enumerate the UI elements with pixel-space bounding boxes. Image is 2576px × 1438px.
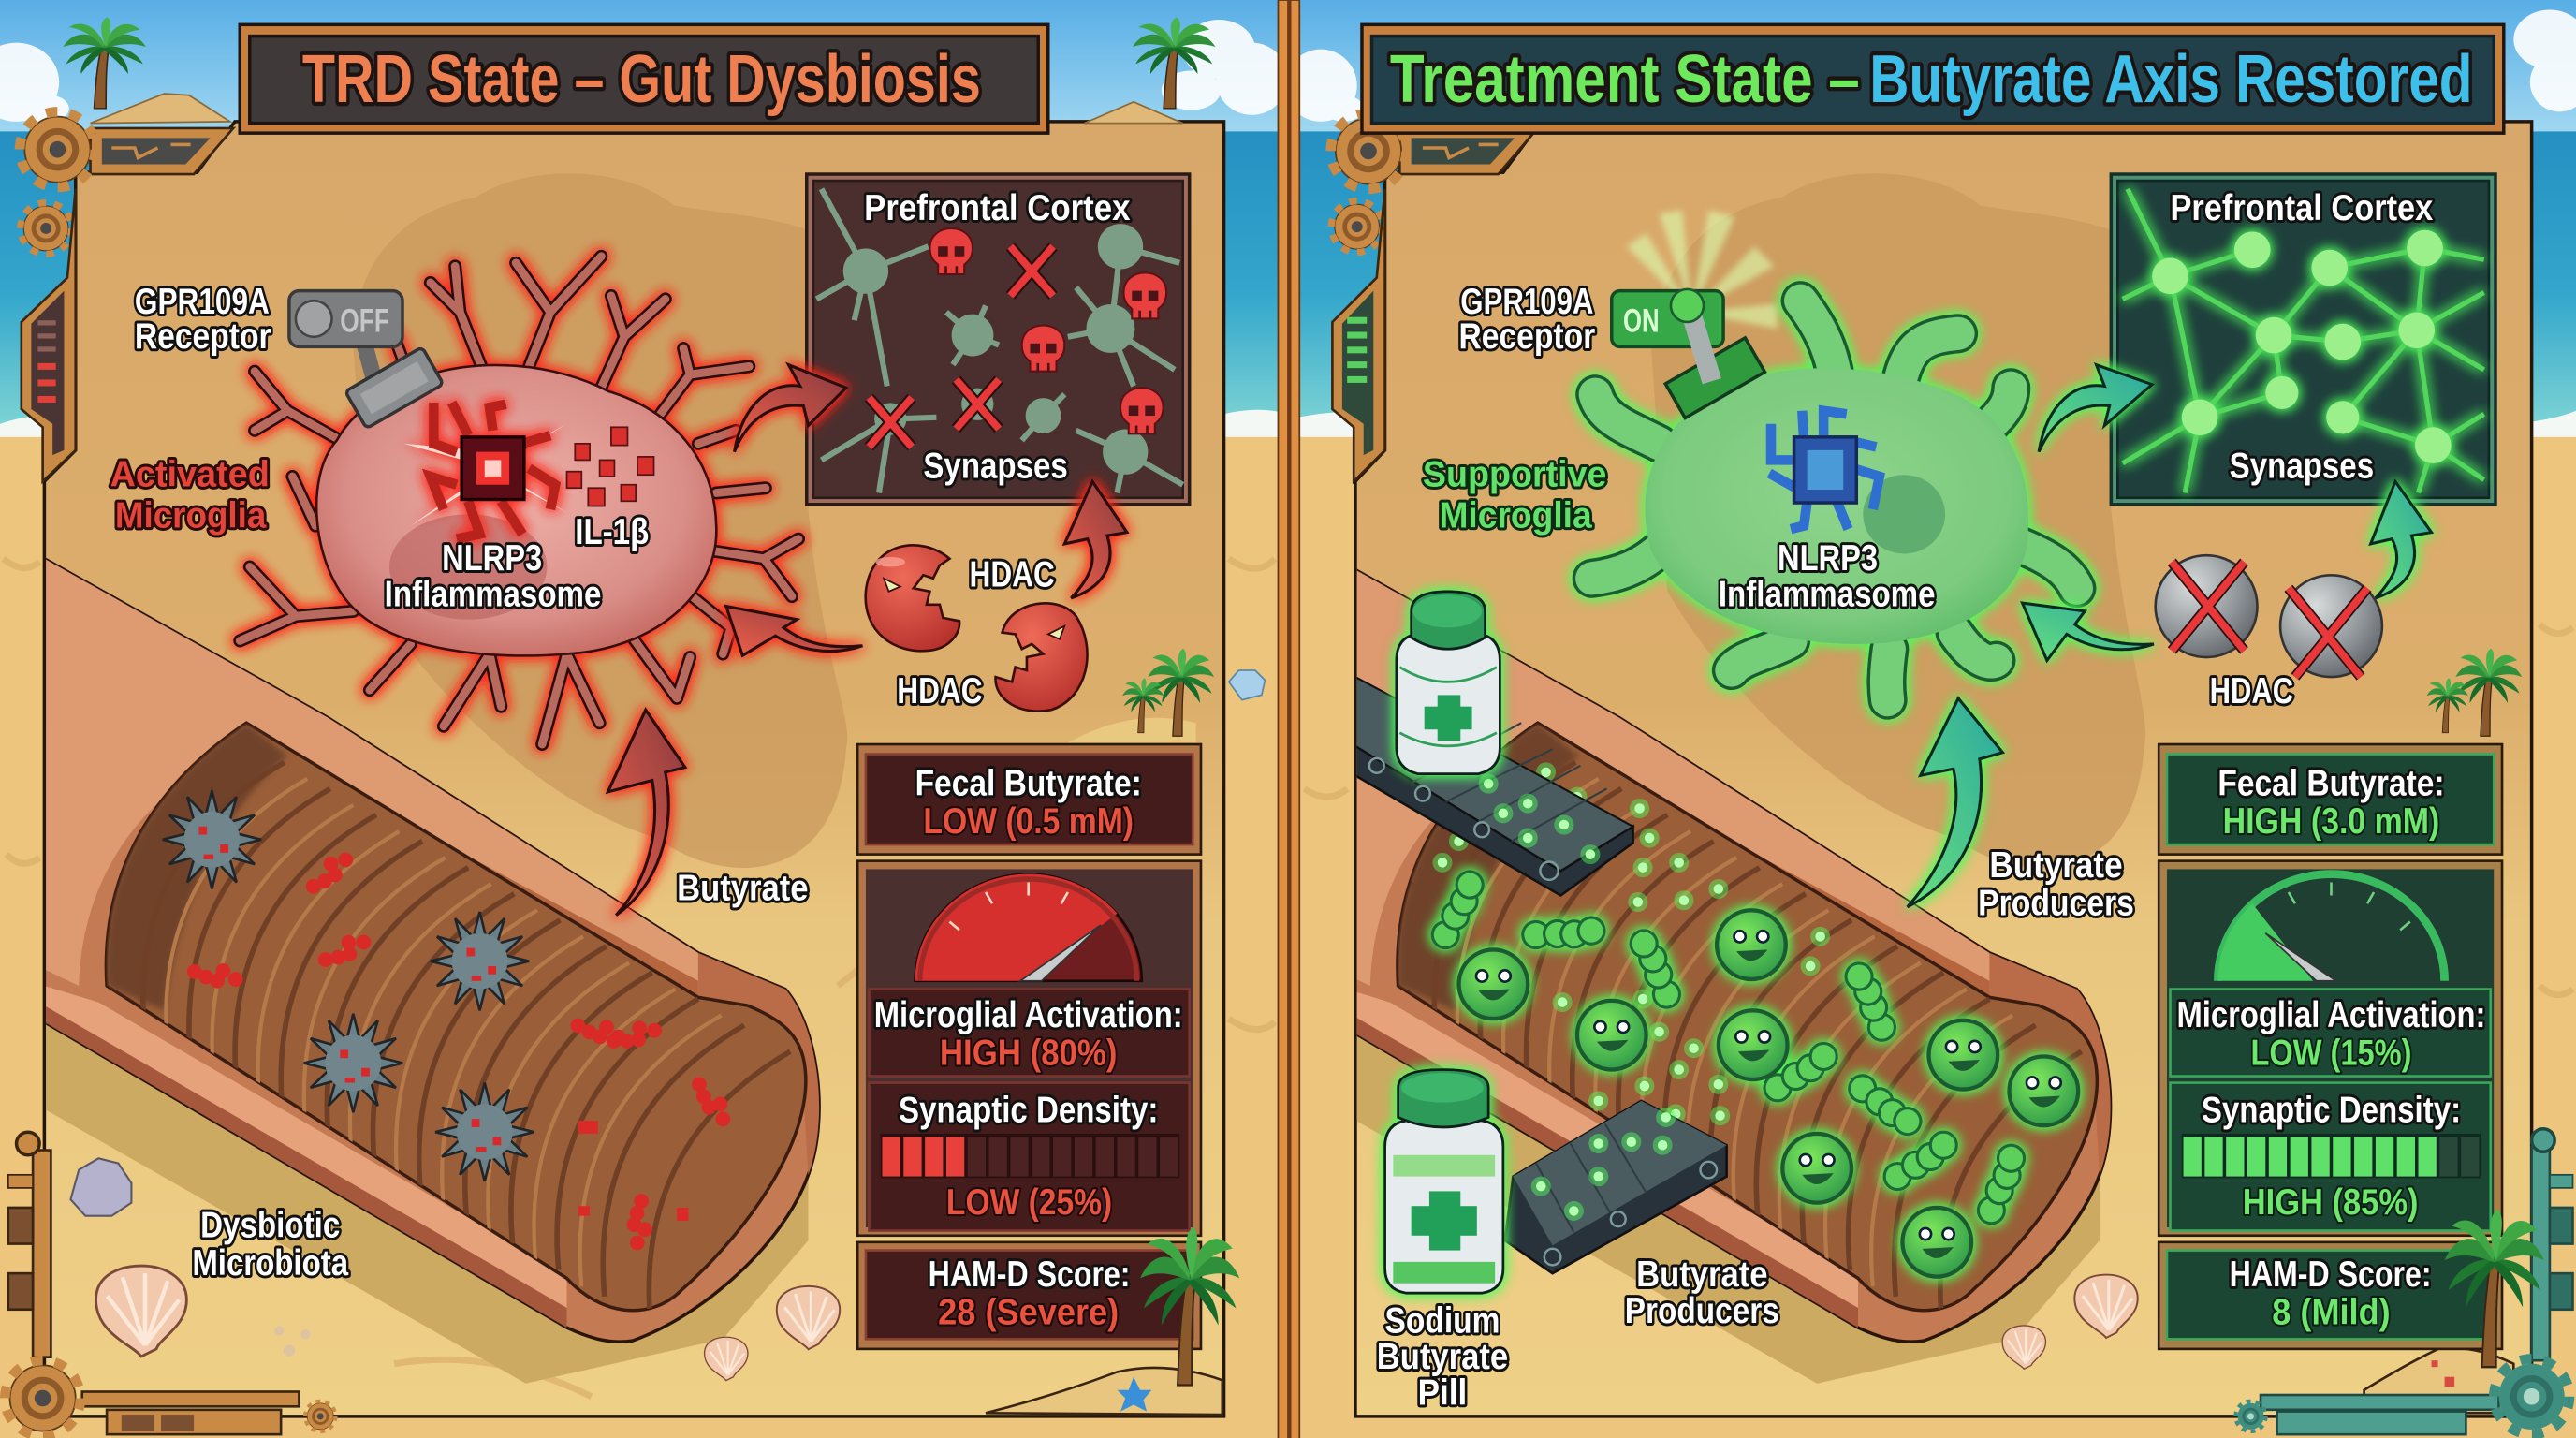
frame ornament: right gears and circuit	[1331, 113, 2572, 1434]
arrow: HDAC to cortex	[1064, 481, 1127, 598]
stat: gauge and density right: Microglial Activation:	[2177, 995, 2485, 1035]
stat: gauge and density right: HIGH (85%)	[2243, 1182, 2419, 1223]
supportive microglia label: Microglia	[1439, 495, 1592, 536]
butyrate producers label upper: Producers	[1978, 884, 2134, 924]
cortex panel left	[807, 174, 1190, 505]
supportive microglia cell	[1592, 301, 2076, 700]
NLRP3 label left	[385, 538, 601, 615]
NLRP3 label left: Inflammasome	[385, 575, 601, 615]
HDAC labels: HDAC	[970, 555, 1055, 595]
stat: HAM-D left	[857, 1242, 1201, 1349]
cell nucleus shading	[389, 514, 547, 620]
title: treatment state	[1362, 24, 2504, 133]
microglial activation gauge	[2217, 874, 2445, 981]
stat: fecal butyrate left	[857, 744, 1201, 855]
stat: gauge and density right	[2159, 861, 2502, 1236]
title: treatment state: Treatment State –	[1390, 42, 1860, 117]
top sodium butyrate bottle	[1397, 592, 1500, 774]
stat: fecal butyrate left: Fecal Butyrate:	[915, 763, 1142, 803]
arrow: butyrate to microglia treatment	[1908, 698, 2002, 907]
panel frame and sand	[44, 122, 1224, 1416]
receptor switch on: ON	[1623, 303, 1660, 340]
activated microglia cell	[240, 257, 798, 744]
HDAC labels	[897, 555, 1055, 712]
sodium butyrate pill label: Sodium	[1385, 1300, 1500, 1341]
activated microglia label: Activated	[110, 454, 270, 494]
butyrate label: Butyrate	[677, 869, 809, 909]
HDAC label right: HDAC	[2210, 671, 2293, 712]
IL-1 beta particles	[567, 427, 654, 506]
inhibited HDAC right sphere	[2280, 575, 2382, 677]
title: TRD state	[240, 24, 1048, 133]
arrow: microglia to cortex treatment	[2039, 365, 2152, 452]
NLRP3 inflammasome active chip	[404, 403, 567, 539]
receptor label right	[1459, 282, 1595, 357]
stat: HAM-D left: 28 (Severe)	[938, 1293, 1119, 1333]
stat: gauge and density left: Synaptic Density:	[899, 1091, 1158, 1131]
butyrate sparkles	[1432, 762, 1830, 1125]
right cell nucleus shading	[1863, 475, 1945, 553]
stat: fecal butyrate right: HIGH (3.0 mM)	[2223, 801, 2439, 842]
sodium butyrate pill label: Pill	[1418, 1373, 1467, 1414]
palm over HAM-D left	[1140, 1227, 1239, 1385]
stat: gauge and density left: LOW (25%)	[946, 1182, 1112, 1223]
HDAC enzyme bottom	[996, 603, 1088, 712]
microglial activation gauge	[915, 874, 1142, 981]
receptor label right: Receptor	[1459, 316, 1595, 357]
butyrate producers label lower: Butyrate	[1636, 1255, 1767, 1295]
NLRP3 label right: NLRP3	[1778, 538, 1878, 579]
center divider	[1278, 0, 1299, 1438]
stat: gauge and density right: Synaptic Density:	[2202, 1091, 2461, 1131]
receptor label left	[135, 282, 271, 357]
top conveyor belt	[1355, 677, 1633, 895]
inhibited HDAC left sphere	[2156, 555, 2258, 657]
NLRP3 inflammasome inactive chip	[1769, 411, 1880, 529]
arrow: butyrate to microglia	[607, 710, 685, 916]
cortex panel left: Prefrontal Cortex	[864, 188, 1131, 228]
panel frame and sand	[1355, 122, 2532, 1416]
arrow: HDAC to cortex treatment	[2371, 481, 2432, 598]
stat: fecal butyrate left: LOW (0.5 mM)	[923, 801, 1134, 842]
supportive microglia label: Supportive	[1423, 454, 1606, 494]
stat: gauge and density left: Microglial Activation:	[874, 995, 1183, 1035]
dysbiotic microbiota label: Microbiota	[192, 1243, 349, 1284]
stat: HAM-D right	[2159, 1242, 2502, 1349]
dysbiotic microbiota label: Dysbiotic	[200, 1206, 340, 1246]
stat: HAM-D right: HAM-D Score:	[2230, 1255, 2432, 1295]
skull icons	[929, 228, 1166, 433]
decorative palms, shells and rocks	[63, 17, 1222, 1415]
NLRP3 label right: Inflammasome	[1719, 575, 1936, 615]
frame ornament: left gears and circuit	[5, 111, 335, 1436]
HDAC enzyme top	[866, 545, 959, 651]
blue rock	[1229, 670, 1265, 700]
dysbiotic microbiota label	[192, 1206, 349, 1284]
stat: fecal butyrate right	[2159, 744, 2502, 855]
bottom sodium butyrate pill bottle	[1385, 1070, 1503, 1293]
arrow: HDAC to microglia	[726, 607, 862, 655]
HDAC labels: HDAC	[897, 671, 983, 712]
receptor label right: GPR109A	[1460, 282, 1593, 322]
palm over HAM-D right	[2445, 1209, 2544, 1367]
panel: treatment state	[1336, 122, 2532, 1416]
butyrate producer bacteria	[1412, 867, 2078, 1277]
arrow: microglia to cortex	[735, 365, 846, 452]
cortex panel right: Synapses	[2230, 447, 2374, 487]
NLRP3 label right	[1719, 538, 1936, 615]
stat: HAM-D left: HAM-D Score:	[929, 1255, 1131, 1295]
sodium butyrate pill label: Butyrate	[1377, 1337, 1508, 1377]
NLRP3 label left: NLRP3	[442, 538, 542, 579]
receptor label left: Receptor	[135, 316, 271, 357]
damaged neurons	[816, 189, 1183, 493]
cortex panel right	[2111, 174, 2496, 505]
stat: HAM-D right: 8 (Mild)	[2272, 1293, 2391, 1333]
synaptic density bar	[2182, 1134, 2481, 1178]
butyrate producers label upper	[1978, 845, 2134, 924]
dysbiotic bacteria	[163, 790, 742, 1253]
bottom conveyor belt	[1505, 1101, 1727, 1273]
butyrate producers label lower: Producers	[1625, 1291, 1779, 1331]
sodium butyrate pill label	[1377, 1300, 1508, 1414]
restored neural network	[2123, 189, 2484, 493]
sand patch behind microglia	[353, 173, 847, 868]
sand patch behind microglia	[1651, 173, 2145, 868]
receptor switch off: OFF	[340, 303, 389, 340]
gut tube	[44, 559, 819, 1384]
stat: fecal butyrate right: Fecal Butyrate:	[2217, 763, 2445, 803]
arrow: HDAC to microglia treatment	[2023, 603, 2154, 661]
supportive microglia label	[1423, 454, 1606, 536]
butyrate producers label upper: Butyrate	[1989, 845, 2123, 886]
receptor switch off	[289, 291, 444, 429]
title: TRD state: TRD State – Gut Dysbiosis	[302, 42, 981, 117]
receptor switch on	[1612, 289, 1764, 418]
activated microglia label	[110, 454, 270, 536]
receptor label left: GPR109A	[135, 282, 270, 322]
activated microglia label: Microglia	[115, 495, 267, 536]
synaptic density bar	[881, 1134, 1179, 1178]
cortex panel left: Synapses	[923, 447, 1068, 487]
cortex panel right: Prefrontal Cortex	[2170, 188, 2434, 228]
IL-1 beta label: IL-1β	[575, 512, 649, 552]
stat: gauge and density right: LOW (15%)	[2250, 1033, 2411, 1073]
butyrate producers label lower	[1625, 1255, 1779, 1331]
broken synapse marks	[869, 246, 1053, 447]
panel: TRD state	[44, 17, 1224, 1416]
decorative palms and shells	[2002, 649, 2522, 1413]
stat: gauge and density left: HIGH (80%)	[940, 1033, 1117, 1073]
receptor glow rays	[1627, 211, 1778, 329]
gut tube	[1336, 559, 2111, 1384]
stat: gauge and density left	[857, 861, 1201, 1236]
